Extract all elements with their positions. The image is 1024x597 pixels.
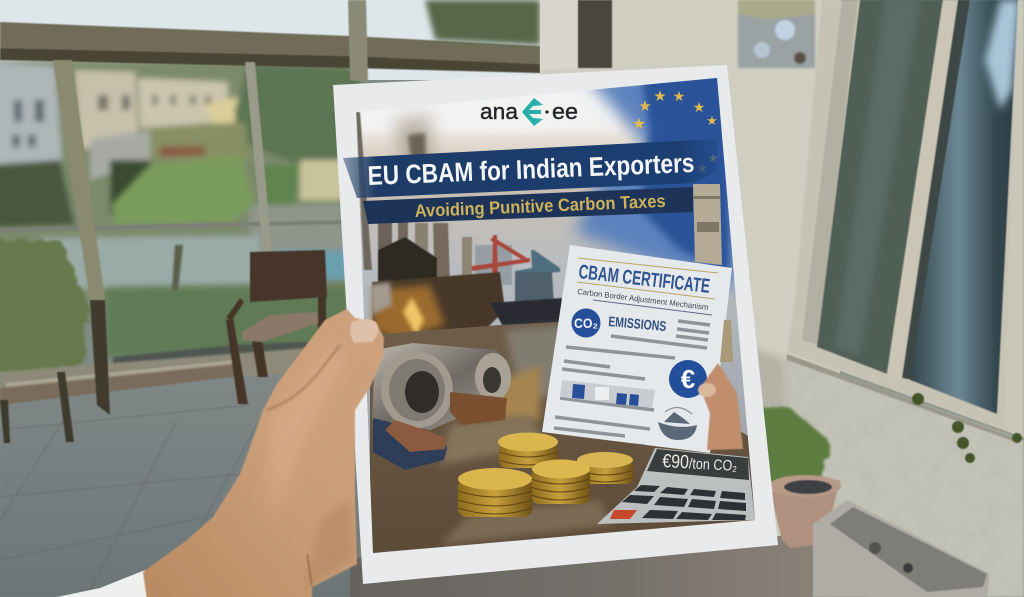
window (787, 0, 1024, 441)
chair (226, 250, 327, 404)
CO2 badge: CO₂ (574, 315, 598, 331)
logo (480, 98, 578, 126)
wall (540, 0, 840, 560)
EU flag: ★ (708, 151, 718, 165)
plant (755, 404, 828, 490)
steel and timber stacks (450, 392, 507, 425)
glass table frame (0, 372, 74, 443)
logo: ee (552, 99, 578, 124)
door (578, 0, 612, 68)
flyer artwork (356, 70, 755, 560)
flyer paper (333, 65, 778, 584)
subtitle text: Avoiding Punitive Carbon Taxes (414, 191, 666, 221)
EU flag: ★ (673, 88, 685, 104)
sky (0, 0, 560, 80)
euro badge: € (681, 364, 695, 394)
fingers holding certificate (698, 363, 743, 450)
arch monument (693, 184, 722, 265)
thumb nail (350, 319, 378, 343)
industry (366, 222, 562, 334)
scale icon (658, 407, 697, 440)
lower wall (785, 354, 1024, 597)
CBAM certificate (542, 245, 732, 453)
ground (370, 322, 755, 560)
willow foliage (425, 0, 540, 45)
container (813, 500, 990, 597)
euro badge (669, 360, 707, 398)
steel coils (372, 343, 511, 430)
display (647, 449, 749, 480)
top beam (0, 22, 540, 73)
vine leaves (912, 393, 1022, 463)
window posts (53, 0, 368, 415)
title text: EU CBAM for Indian Exporters (367, 148, 695, 191)
view of buildings and trees (0, 60, 360, 300)
rail (0, 220, 345, 232)
EU flag: ★ (632, 116, 646, 133)
holding hand (143, 309, 384, 597)
EU flag: ★ (706, 113, 718, 128)
ledge (113, 340, 345, 368)
distant chimney (356, 112, 372, 270)
smoke stack (408, 133, 426, 160)
emissions label: EMISSIONS (608, 313, 667, 334)
wall picture (738, 0, 815, 68)
logo: ana (480, 99, 519, 124)
foreground plant (0, 240, 90, 375)
sleeve (57, 570, 150, 597)
calculator: €90/ton CO₂ (662, 451, 738, 476)
EU flag: ★ (696, 160, 708, 176)
certificate heading: CBAM CERTIFICATE (577, 261, 711, 298)
EU flag: ★ (638, 98, 652, 115)
shipping containers (373, 418, 447, 470)
flyer title band (343, 139, 717, 198)
EU flag: ★ (653, 88, 667, 105)
keypad (610, 485, 746, 520)
pot (769, 475, 841, 548)
calculator (597, 448, 755, 524)
certificate subheading: Carbon Border Adjustment Mechanism (577, 287, 709, 312)
gold coin stacks (458, 432, 634, 517)
EU flag (575, 70, 735, 290)
banknote edge behind certificate (720, 320, 733, 362)
floor (0, 370, 360, 597)
CO2 badge (572, 308, 600, 338)
flyer subtitle band (363, 187, 693, 224)
placeholder lines (553, 321, 710, 446)
certificate table (560, 380, 655, 408)
lower floor strip (350, 528, 830, 597)
EU flag: ★ (693, 99, 705, 115)
